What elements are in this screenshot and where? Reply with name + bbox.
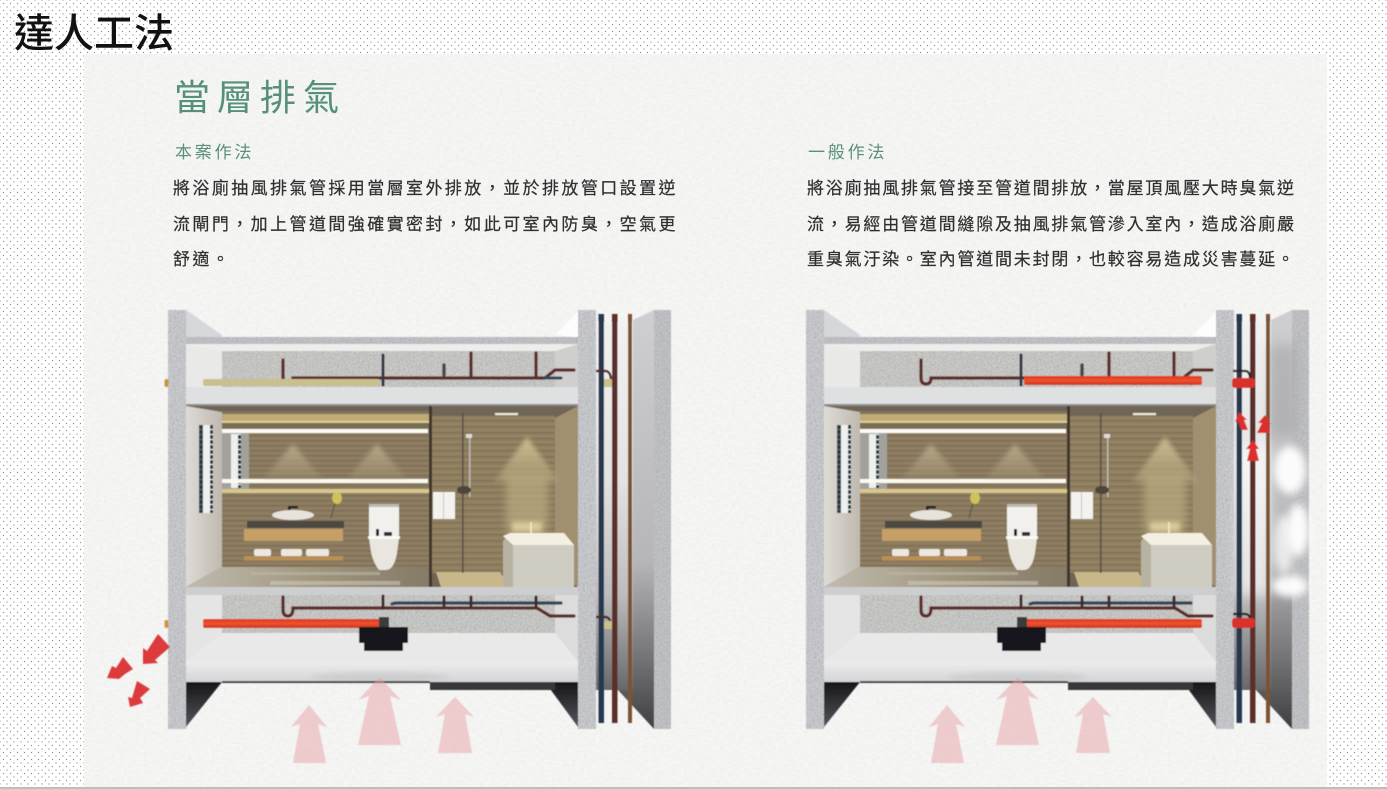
text block: this project's method: 將浴廁抽風排氣管採用當層室外排放，並於排放管口設置逆	[173, 179, 678, 198]
vertical riser pipes	[598, 314, 632, 723]
red duct connections to shaft	[1232, 371, 1255, 628]
exhaust fan box	[359, 617, 408, 651]
ceiling pipes, lower plenum	[283, 596, 574, 616]
building section shell	[168, 310, 671, 729]
building section shell	[806, 310, 1309, 729]
odor haze in the shaft	[1238, 345, 1309, 597]
text block: general method: 流，易經由管道間縫隙及抽風排氣管滲入室內，造成浴廁嚴	[807, 214, 1296, 234]
subheading: this project's method: 本案作法	[175, 143, 254, 162]
page title: 達人工法	[14, 12, 174, 56]
riser connections	[596, 371, 612, 629]
diagram: this project's method, side exhaust	[107, 310, 671, 763]
text block: general method	[807, 179, 1296, 269]
text block: general method: 重臭氣汙染。室內管道間未封閉，也較容易造成災害蔓延。	[807, 250, 1296, 269]
pink arrows: rising odor	[291, 677, 474, 763]
subheading: general method: 一般作法	[808, 143, 887, 162]
vertical riser pipes	[1236, 314, 1270, 723]
section heading: 當層排氣	[174, 77, 346, 118]
insulated yellow duct, upper plenum	[203, 379, 380, 386]
red arrows: exhaust to outdoors	[107, 634, 170, 707]
red exhaust duct, lower plenum	[203, 619, 380, 628]
text block: general method: 將浴廁抽風排氣管接至管道間排放，當屋頂風壓大時臭氣逆	[807, 179, 1296, 198]
red duct, upper plenum	[1024, 376, 1202, 385]
bathroom interior	[824, 406, 1216, 587]
bathroom interior	[186, 406, 578, 587]
pink arrows: rising odor	[929, 677, 1112, 763]
outdoor vent caps	[164, 379, 168, 628]
text block: this project's method	[173, 179, 678, 269]
text block: this project's method: 舒適。	[173, 250, 231, 269]
ceiling pipes, lower plenum	[921, 596, 1212, 616]
ceiling pipes, upper plenum	[283, 353, 574, 385]
ceiling pipes, upper plenum	[921, 353, 1212, 385]
exhaust fan box	[997, 617, 1046, 651]
diagram: general method, shaft exhaust	[806, 310, 1309, 763]
red arrows: odor backflow in shaft	[1235, 412, 1271, 461]
red duct, lower plenum	[1026, 619, 1202, 628]
text block: this project's method: 流閘門，加上管道間強確實密封，如此可室內防臭，空氣更	[173, 214, 678, 234]
